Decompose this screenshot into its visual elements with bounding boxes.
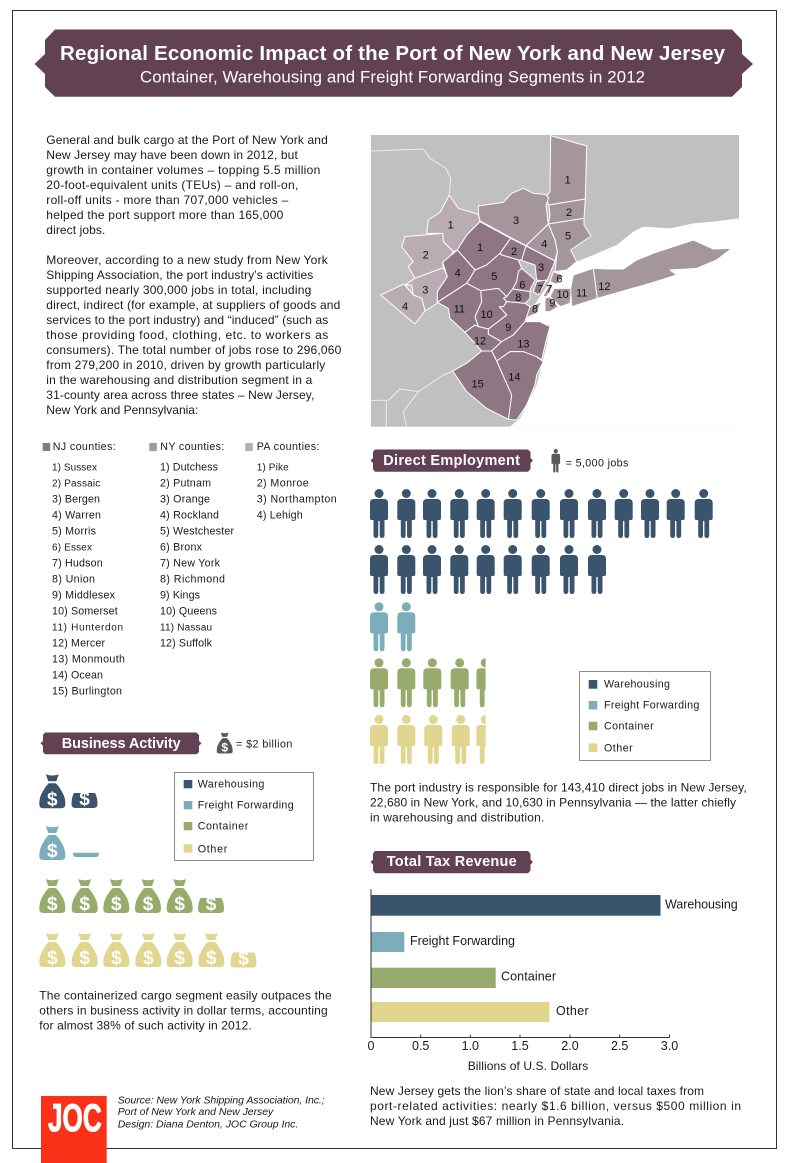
map labels: 7 xyxy=(546,283,552,295)
list: NJ counties xyxy=(43,441,125,698)
logo: JOC xyxy=(41,1096,107,1163)
list: NY counties: 8) Richmond xyxy=(160,574,225,586)
map labels: 10 xyxy=(481,309,493,321)
map labels: 4 xyxy=(455,268,461,280)
pictogram: other activity: $ xyxy=(47,948,58,969)
intro text: those providing food, clothing, etc. to workers as xyxy=(46,328,328,342)
list: PA counties: 1) Pike xyxy=(257,463,289,474)
source credits: Design: Diana Denton, JOC Group Inc. xyxy=(118,1118,298,1130)
map labels: 2 xyxy=(423,249,429,261)
list: NY counties: 10) Queens xyxy=(160,606,217,618)
intro text: 31-county area across three states – New Jersey, xyxy=(46,388,314,402)
pictogram: warehousing activity: $ xyxy=(79,789,90,810)
intro text: Shipping Association, the port industry’s activities xyxy=(46,268,313,282)
intro text: New York and Pennsylvania: xyxy=(46,403,198,417)
intro text: direct, indirect (for example, at suppliers of goods and xyxy=(46,298,340,312)
bar: container xyxy=(371,968,556,988)
bar: warehousing xyxy=(371,895,738,916)
pictogram: container activity: $ xyxy=(143,894,154,915)
map labels: 7 xyxy=(537,284,543,296)
text: business activity note xyxy=(39,988,332,1032)
chart axes: 1.0 xyxy=(462,1039,479,1053)
map labels: 1 xyxy=(448,220,454,232)
list: NY counties: 9) Kings xyxy=(160,590,200,602)
list: PA counties: PA counties: xyxy=(257,441,319,453)
list: PA counties xyxy=(245,441,337,522)
map labels: 5 xyxy=(565,231,571,243)
legend: direct employment: Other xyxy=(604,742,633,754)
legend: business activity: Other xyxy=(198,844,228,856)
pictogram: other activity: $ xyxy=(79,948,90,969)
heading: Direct Employment xyxy=(370,450,533,472)
list: NY counties: 11) Nassau xyxy=(160,623,212,634)
intro text: services to the port industry) and “induced” (such as xyxy=(46,313,328,327)
pictogram: container activity xyxy=(39,879,224,915)
subtitle: Container, Warehousing and Freight Forwarding Segments in 2012 xyxy=(140,68,645,86)
pictogram: container activity: $ xyxy=(206,894,217,915)
list: NY counties: 3) Orange xyxy=(160,494,210,506)
intro text: consumers). The total number of jobs rose to 296,060 xyxy=(46,343,342,357)
text: direct employment note: 22,680 in New York, and 10,630 in Pennsylvania — the latter chiefly xyxy=(370,796,736,810)
pictogram: other activity: $ xyxy=(143,948,154,969)
list: NY counties: 5) Westchester xyxy=(160,526,234,538)
legend: direct employment: Warehousing xyxy=(604,679,670,691)
heading: Total Tax Revenue: Total Tax Revenue xyxy=(387,854,517,870)
title: Regional Economic Impact of the Port of New York and New Jersey xyxy=(60,42,726,65)
pictogram: freight forwarding activity xyxy=(39,823,99,862)
list: NJ counties: 2) Passaic xyxy=(52,479,100,490)
chart axes xyxy=(368,889,678,1073)
text: tax revenue note: port-related activities: nearly $1.6 billion, versus $500 million in xyxy=(370,1099,741,1113)
list: NJ counties: 1) Sussex xyxy=(52,463,97,474)
intro text: direct jobs. xyxy=(46,223,105,237)
pictogram: other activity: $ xyxy=(111,948,122,969)
list: NY counties: 4) Rockland xyxy=(160,510,219,522)
bar: freight forwarding: Freight Forwarding xyxy=(410,934,515,948)
list: PA counties: 4) Lehigh xyxy=(257,510,303,522)
pictogram: container activity: $ xyxy=(79,894,90,915)
intro text: in the warehousing and distribution segment in a xyxy=(46,373,313,387)
list: NJ counties: NJ counties: xyxy=(53,441,116,453)
intro text: General and bulk cargo at the Port of New York and xyxy=(46,133,328,147)
legend: business activity xyxy=(174,772,314,860)
map labels: 9 xyxy=(505,322,511,334)
list: NJ counties: 4) Warren xyxy=(52,510,101,522)
legend: direct employment: Freight Forwarding xyxy=(604,700,699,712)
map labels: 1 xyxy=(477,242,483,254)
map labels: 6 xyxy=(556,273,562,285)
bar: other: Other xyxy=(556,1004,589,1018)
pictogram: freight forwarding jobs xyxy=(370,602,415,651)
chart axes: 1.5 xyxy=(511,1039,529,1053)
pictogram: freight forwarding activity: $ xyxy=(47,841,58,862)
map labels: 2 xyxy=(566,207,572,219)
list: NJ counties: 7) Hudson xyxy=(52,558,103,570)
title banner xyxy=(34,30,753,97)
chart axes: Billions of U.S. Dollars xyxy=(468,1059,588,1073)
pictogram: warehousing activity: $ xyxy=(47,789,58,810)
pictogram: warehousing jobs xyxy=(370,489,713,594)
list: PA counties: 2) Monroe xyxy=(257,478,309,490)
source credits: Port of New York and New Jersey xyxy=(118,1106,274,1118)
map labels: 5 xyxy=(491,271,497,283)
pictogram: container activity: $ xyxy=(111,894,122,915)
chart axes: 2.5 xyxy=(611,1039,628,1053)
icon: money bag legend: $ xyxy=(221,740,228,754)
text: tax revenue note: New Jersey gets the lion’s share of state and local taxes from xyxy=(370,1084,704,1098)
pictogram: other activity xyxy=(39,933,256,970)
intro text: New Jersey may have been down in 2012, but xyxy=(46,148,298,162)
map labels: 10 xyxy=(557,289,569,301)
list: NJ counties: 13) Monmouth xyxy=(52,654,125,666)
bar: container: Container xyxy=(501,970,556,984)
pictogram: warehousing activity xyxy=(39,774,98,810)
list: NY counties: 6) Bronx xyxy=(160,542,203,554)
chart axes: 3.0 xyxy=(661,1039,678,1053)
list: NJ counties: 14) Ocean xyxy=(52,670,103,682)
NJ counties xyxy=(437,222,555,420)
legend: business activity: Warehousing xyxy=(198,779,264,791)
list: NJ counties: 12) Mercer xyxy=(52,638,105,650)
intro text: roll-off units - more than 707,000 vehicles – xyxy=(46,193,289,207)
map labels: 3 xyxy=(422,284,428,296)
chart axes: 0.5 xyxy=(412,1039,429,1053)
icon: person legend: = 5,000 jobs xyxy=(566,458,628,470)
list: NY counties: 1) Dutchess xyxy=(160,462,218,474)
intro text: growth in container volumes – topping 5.5 million xyxy=(46,163,320,177)
map labels: 8 xyxy=(532,304,538,316)
map labels: 12 xyxy=(598,281,610,293)
list: NJ counties: 11) Hunterdon xyxy=(52,623,123,634)
intro text: Moreover, according to a new study from New York xyxy=(46,253,329,267)
NY counties xyxy=(478,136,732,318)
map labels: 11 xyxy=(454,303,465,315)
pictogram: other activity: $ xyxy=(238,948,249,970)
list: NJ counties: 5) Morris xyxy=(52,526,96,538)
map labels: 14 xyxy=(508,372,520,384)
intro text: from 279,200 in 2010, driven by growth particularly xyxy=(46,358,325,372)
heading: Total Tax Revenue xyxy=(370,851,533,873)
list: NJ counties: 6) Essex xyxy=(52,543,92,554)
source credits: Source: New York Shipping Association, Inc.; xyxy=(118,1094,325,1106)
list: NJ counties: 9) Middlesex xyxy=(52,590,116,602)
map labels: 3 xyxy=(513,215,519,227)
map labels: 6 xyxy=(519,280,525,292)
source credits xyxy=(118,1094,325,1130)
map labels: 11 xyxy=(576,288,587,300)
list: NJ counties: 10) Somerset xyxy=(52,606,118,618)
chart axes: 2.0 xyxy=(561,1039,579,1053)
map labels: 4 xyxy=(541,238,547,250)
map labels xyxy=(402,174,610,390)
logo: JOC: JOC xyxy=(48,1097,102,1140)
map labels: 3 xyxy=(538,262,544,274)
bar: warehousing: Warehousing xyxy=(665,897,738,911)
bar chart: total tax revenue xyxy=(368,889,738,1073)
chart axes: 0 xyxy=(368,1039,375,1053)
pictogram: other activity: $ xyxy=(174,948,185,969)
map labels: 4 xyxy=(402,301,408,313)
map labels: 12 xyxy=(474,335,486,347)
text: business activity note: for almost 38% of such activity in 2012. xyxy=(39,1018,252,1032)
legend: business activity: Freight Forwarding xyxy=(198,800,294,812)
map labels: 15 xyxy=(472,378,484,390)
map labels: 8 xyxy=(515,292,521,304)
bar: other xyxy=(371,1002,589,1022)
intro text: supported nearly 300,000 jobs in total, including xyxy=(46,283,311,297)
text: direct employment note: The port industry is responsible for 143,410 direct jobs in New Jersey, xyxy=(370,781,747,795)
list: NY counties xyxy=(149,441,234,650)
list: NJ counties: 8) Union xyxy=(52,574,95,586)
heading: Direct Employment: Direct Employment xyxy=(383,453,520,469)
intro text xyxy=(46,133,342,417)
icon: money bag legend: = $2 billion xyxy=(236,739,292,751)
list: PA counties: 3) Northampton xyxy=(257,494,337,506)
text: business activity note: others in business activity in dollar terms, accounting xyxy=(39,1003,328,1017)
list: NJ counties: 15) Burlington xyxy=(52,686,122,698)
text: direct employment note: in warehousing and distribution. xyxy=(370,811,544,825)
pictogram: container jobs xyxy=(370,658,494,707)
list: NY counties: 7) New York xyxy=(160,558,221,570)
legend: direct employment xyxy=(580,672,710,760)
pictogram: container activity: $ xyxy=(47,894,58,915)
text: tax revenue note xyxy=(370,1084,741,1128)
heading: Business Activity xyxy=(40,732,202,754)
pictogram: container activity: $ xyxy=(174,894,185,915)
list: NY counties: NY counties: xyxy=(160,441,224,453)
intro text: 20-foot-equivalent units (TEUs) – and roll-on, xyxy=(46,178,298,192)
text: tax revenue note: New York and just $67 million in Pennsylvania. xyxy=(370,1114,624,1128)
pictogram: other activity: $ xyxy=(206,948,217,969)
map labels: 13 xyxy=(517,338,529,350)
text: business activity note: The containerized cargo segment easily outpaces the xyxy=(39,988,332,1002)
legend: business activity: Container xyxy=(198,821,249,833)
map labels: 9 xyxy=(549,297,555,309)
text: direct employment note xyxy=(370,781,747,825)
list: NY counties: 2) Putnam xyxy=(160,478,211,490)
PA counties xyxy=(381,195,480,324)
legend: direct employment: Container xyxy=(604,721,654,733)
county map xyxy=(371,135,739,427)
heading: Business Activity: Business Activity xyxy=(62,736,181,752)
bar: freight forwarding xyxy=(371,932,515,952)
pictogram: other jobs xyxy=(370,715,494,764)
icon: money bag legend xyxy=(217,733,292,754)
icon: person legend xyxy=(551,449,628,472)
map labels: 1 xyxy=(565,174,571,186)
list: NJ counties: 3) Bergen xyxy=(52,494,100,506)
list: NY counties: 12) Suffolk xyxy=(160,638,213,650)
intro text: helped the port support more than 165,000 xyxy=(46,208,284,222)
map labels: 2 xyxy=(511,246,517,258)
